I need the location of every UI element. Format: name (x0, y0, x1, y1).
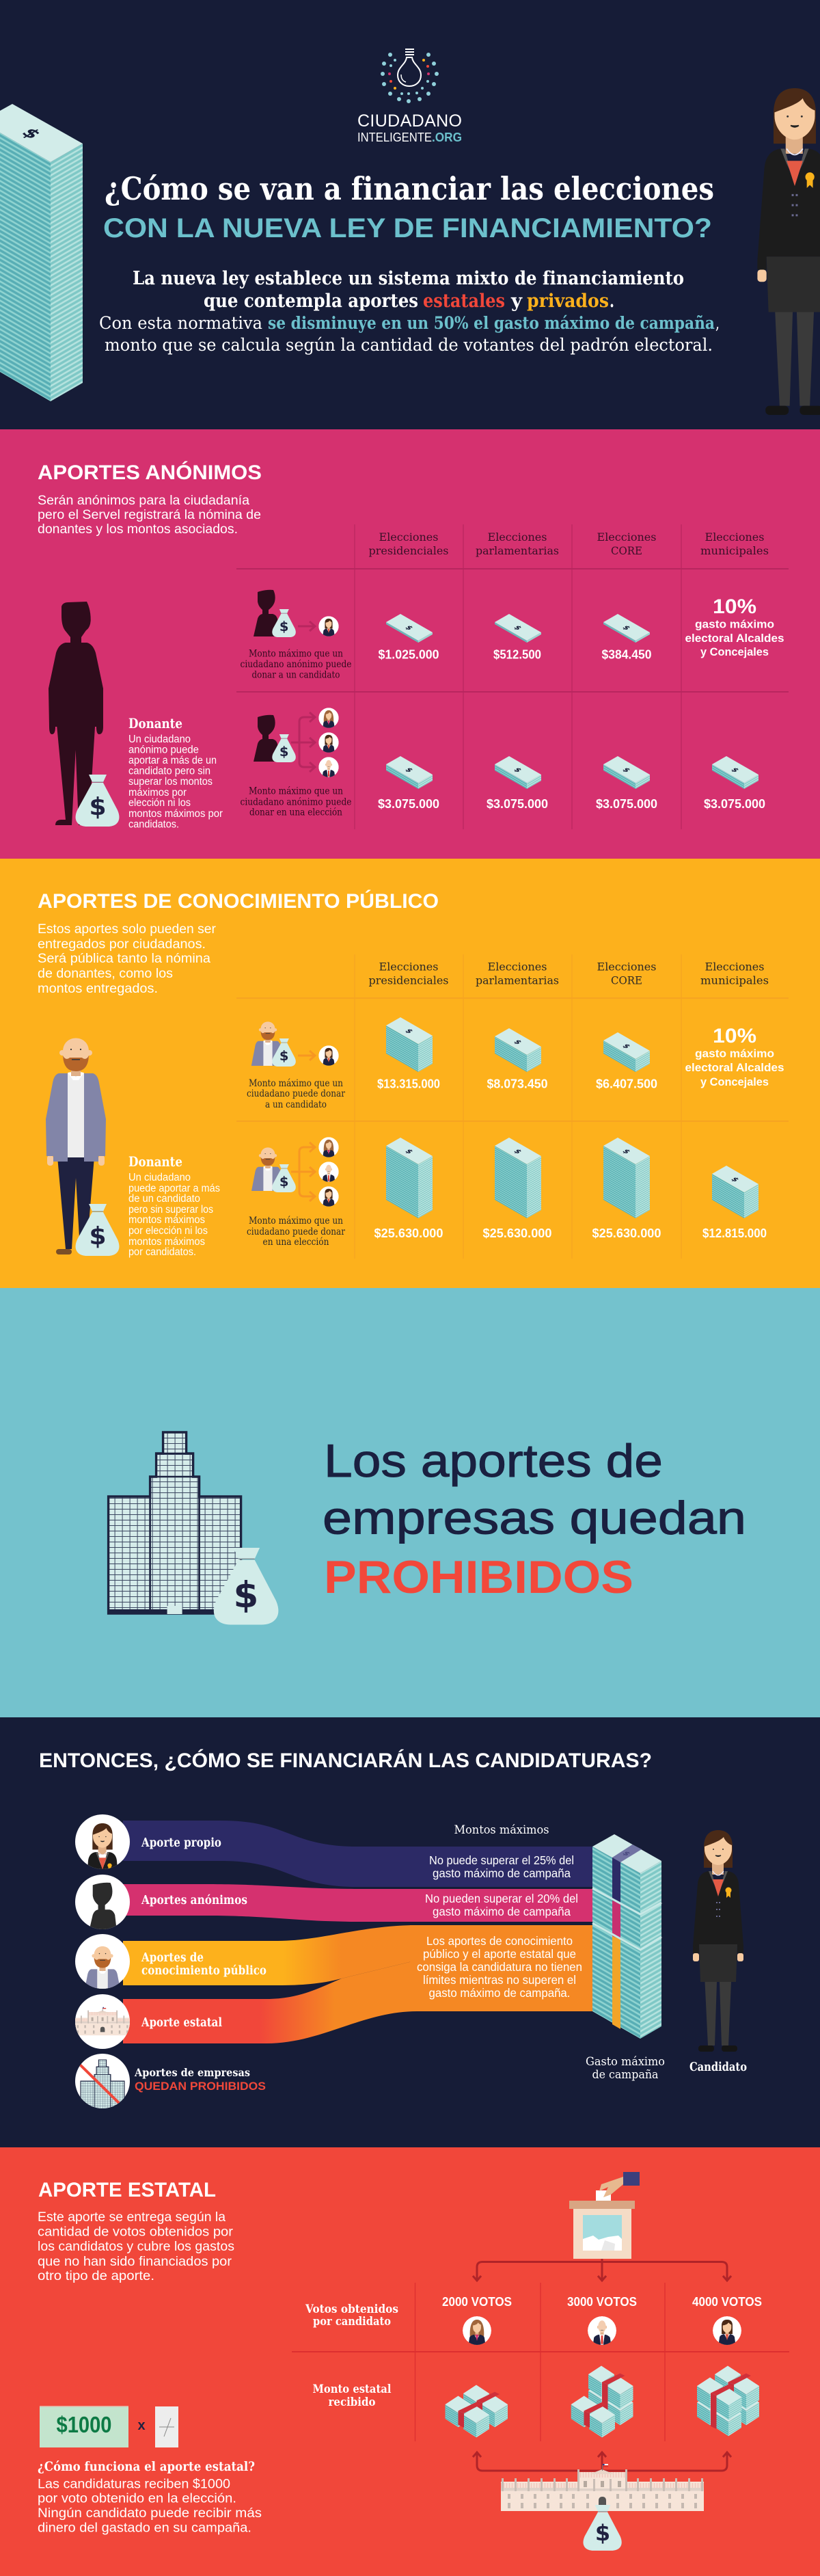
intro text: , (715, 313, 720, 333)
row 2: donor to several candidates: Monto máximo que un (249, 1216, 343, 1226)
intro text: estatales (423, 291, 505, 312)
intro text: Con esta normativa (99, 313, 262, 333)
band labels: Aportes de (141, 1951, 204, 1965)
donante text: puede aportar a más (128, 1183, 220, 1194)
icon: money bag: $ (89, 1222, 107, 1250)
figure: candidata (693, 1830, 743, 2052)
avatar: aportes anónimos (75, 1875, 130, 1935)
chart: montos por elección: $25.630.000 (482, 1226, 552, 1240)
callout: 10% municipales: electoral Alcaldes (685, 1062, 784, 1074)
intro text (99, 268, 720, 355)
description: otro tipo de aporte. (38, 2269, 154, 2283)
chart: montos por candidato: $13.315.000 (377, 1077, 440, 1091)
chart: montos por elección: $3.075.000 (596, 797, 657, 811)
panel: aporte estatal (0, 2147, 820, 2576)
icon: building and money bag (109, 1432, 278, 1624)
chart: montos por candidato: $ (512, 624, 524, 631)
chart: montos por elección: $ (620, 1148, 633, 1155)
row 1: donor to one candidate: a un candidato (265, 1099, 327, 1110)
statement: Los aportes de (324, 1435, 663, 1487)
chart: montos por elección: $ (729, 1176, 741, 1183)
column: 4000 votos: 4000 VOTOS (692, 2295, 762, 2309)
intro text: . (610, 291, 614, 312)
donante text: Un ciudadano (128, 1172, 191, 1183)
chart: montos por elección: $ (403, 1148, 415, 1155)
panel: empresas prohibidas (0, 1288, 820, 1717)
description: Este aporte se entrega según la (38, 2210, 226, 2225)
description: Será pública tanto la nómina (38, 952, 210, 966)
chart: montos por candidato: $ (512, 1038, 524, 1045)
table header: municipales (700, 974, 769, 987)
description: entregados por ciudadanos. (38, 937, 206, 952)
intro text: privados (527, 291, 609, 312)
row 2: donor to several candidates: ciudadano anónimo puede (241, 797, 351, 808)
statement (323, 1435, 746, 1603)
row labels: Votos obtenidos (305, 2303, 398, 2316)
chart: montos por elección: $3.075.000 (487, 797, 548, 811)
description (38, 2210, 234, 2283)
donante text: elección ni los (128, 797, 191, 809)
heading: APORTES DE CONOCIMIENTO PÚBLICO (38, 889, 439, 913)
table header: presidenciales (369, 544, 448, 557)
chart: montos por candidato: $ (403, 1028, 415, 1034)
table header: Elecciones (379, 531, 439, 544)
statement: empresas quedan (323, 1492, 746, 1544)
table header: Elecciones (705, 960, 764, 974)
donante text: montos máximos por (128, 808, 223, 820)
row 1: donor to one candidate: $ (279, 619, 288, 634)
chart: montos por candidato: $8.073.450 (487, 1077, 548, 1091)
row 2: donor to several candidates: Monto máximo que un (249, 786, 343, 797)
logo: Ciudadano Inteligente: CIUDADANO (357, 111, 462, 131)
flow bands (123, 1821, 592, 2043)
chart: montos por candidato: $ (620, 624, 633, 631)
row 1: donor to one candidate: Monto máximo que un (249, 649, 343, 660)
title (103, 170, 714, 243)
row 2: donor to several candidates (247, 1137, 345, 1248)
callout: 10% municipales: 10% (713, 595, 756, 618)
table header: Elecciones (488, 960, 547, 974)
table header: CORE (611, 974, 642, 987)
avatar: aporte propio (75, 1814, 130, 1869)
row 2: donor to several candidates: $ (279, 1174, 288, 1190)
icon: money bag (76, 1204, 119, 1256)
chart: montos por elección: $ (512, 1148, 524, 1155)
icon: money stack (0, 104, 83, 401)
callout: 10% municipales: gasto máximo (695, 618, 774, 630)
donante text: montos máximos (128, 1236, 205, 1248)
montos máximos text: Montos máximos (454, 1823, 549, 1837)
text: cómo funciona: por voto obtenido en la elección. (38, 2492, 236, 2506)
chart: montos por candidato (377, 1017, 657, 1091)
column: 4000 votos (692, 2295, 762, 2437)
description: donantes y los montos asociados. (38, 522, 238, 537)
table header: Elecciones (597, 531, 656, 544)
row 2: donor to several candidates (241, 708, 351, 818)
montos máximos text: No pueden superar el 20% del (425, 1892, 578, 1905)
montos máximos text: gasto máximo de campaña (433, 1866, 571, 1880)
icon: money bag: $ (595, 2520, 610, 2546)
logo: Ciudadano Inteligente (357, 49, 462, 144)
chart: montos por candidato: $384.450 (601, 648, 652, 662)
row 1: donor to one candidate: ciudadano puede donar (247, 1088, 345, 1099)
text: cómo funciona: Las candidaturas reciben $1000 (38, 2477, 230, 2491)
description: Estos aportes solo pueden ser (38, 922, 217, 937)
row labels: Monto estatal (313, 2383, 392, 2396)
intro text: y (510, 291, 523, 312)
chart: montos por elección: $25.630.000 (592, 1226, 661, 1240)
montos máximos text: consiga la candidatura no tienen (417, 1960, 582, 1974)
heading: APORTE ESTATAL (38, 2179, 216, 2201)
callout: 10% municipales: y Concejales (700, 1076, 769, 1088)
donante text: por candidatos. (128, 1246, 196, 1258)
montos máximos text (417, 1823, 582, 2000)
band labels: conocimiento público (141, 1964, 266, 1978)
table header: parlamentarias (476, 974, 559, 987)
title: ¿Cómo se van a financiar las elecciones (105, 170, 714, 207)
description (38, 922, 217, 996)
heading: APORTES ANÓNIMOS (38, 461, 262, 484)
donante text: Donante (128, 1153, 182, 1170)
table header: Elecciones (488, 531, 547, 544)
text: cómo funciona (38, 2460, 262, 2535)
donante text: de un candidato (128, 1193, 200, 1205)
icon: gasto máximo stack (592, 1834, 661, 2039)
description: los candidatos y cubre los gastos (38, 2240, 234, 2254)
description: de donantes, como los (38, 967, 173, 981)
row 1: donor to one candidate: Monto máximo que un (249, 1078, 343, 1089)
table header (369, 531, 769, 557)
table header: CORE (611, 544, 642, 557)
chart: montos por candidato: $ (403, 624, 415, 631)
chart: montos por candidato: $ (620, 1043, 633, 1049)
statement: PROHIBIDOS (324, 1551, 633, 1603)
chart: montos por candidato: $6.407.500 (596, 1077, 657, 1091)
intro text: monto que se calcula según la cantidad de votantes del padrón electoral. (105, 335, 713, 355)
donante text: candidatos. (128, 819, 179, 831)
table header: Elecciones (597, 960, 656, 974)
callout: 10% municipales: 10% (713, 1025, 756, 1047)
column: 2000 votos (442, 2295, 512, 2438)
panel: cómo se financiarán (40, 1749, 746, 2108)
montos máximos text: gasto máximo de campaña. (429, 1986, 570, 2000)
column: 3000 votos (567, 2295, 637, 2438)
description: pero el Servel registrará la nómina de (38, 508, 261, 522)
row labels (305, 2303, 398, 2409)
callout: 10% municipales: gasto máximo (695, 1047, 774, 1060)
avatar: aporte estatal (75, 1994, 130, 2049)
arrows: from ballot box to votes (473, 2259, 731, 2281)
donante text: máximos por (128, 787, 187, 799)
chart: montos por candidato (379, 614, 652, 662)
donante text: pero sin superar los (128, 1204, 213, 1216)
row 1: donor to one candidate (247, 1021, 345, 1110)
title: CON LA NUEVA LEY DE FINANCIAMIENTO? (103, 213, 712, 243)
donante text: aportar a más de un (128, 755, 217, 766)
row 2: donor to several candidates: $ (279, 744, 288, 760)
montos máximos text: No puede superar el 25% del (429, 1853, 574, 1867)
description: que no han sido financiados por (38, 2255, 232, 2269)
icon: La Moneda palace (501, 2464, 704, 2511)
logo: Ciudadano Inteligente: INTELIGENTE (357, 131, 432, 144)
chart: montos por elección: $3.075.000 (378, 797, 439, 811)
row 1: donor to one candidate: donar a un candidato (251, 670, 340, 681)
chart: montos por candidato: $512.500 (493, 648, 541, 662)
chart: montos por elección (378, 756, 765, 811)
row labels: por candidato (313, 2315, 391, 2329)
callout: 10% municipales (685, 595, 784, 658)
chart: montos por elección: $ (729, 766, 741, 773)
label: candidato: Candidato (689, 2060, 747, 2074)
table header: presidenciales (369, 974, 448, 987)
icon: ballot box (569, 2172, 640, 2259)
icon: money stack: $ (16, 126, 45, 142)
chart: montos por elección: $3.075.000 (704, 797, 765, 811)
figure: donante anónimo: $ (89, 793, 107, 821)
montos máximos text: límites mientras no superen el (423, 1973, 576, 1987)
description: montos entregados. (38, 982, 158, 996)
logo: Ciudadano Inteligente: .ORG (432, 131, 462, 144)
table header: Elecciones (379, 960, 439, 974)
figure: donante anónimo (49, 602, 119, 827)
label: gasto máximo: de campaña (592, 2068, 659, 2082)
formula: x (137, 2418, 146, 2433)
table header: parlamentarias (476, 544, 559, 557)
prohibited label: QUEDAN PROHIBIDOS (135, 2080, 266, 2093)
callout: 10% municipales: electoral Alcaldes (685, 632, 784, 645)
row 1: donor to one candidate: ciudadano anónimo puede (241, 659, 351, 670)
donante text (128, 715, 223, 831)
icon: building and money bag: $ (234, 1574, 258, 1616)
description: Serán anónimos para la ciudadanía (38, 494, 249, 508)
arrows: from state to amounts (473, 2452, 731, 2475)
avatar: conocimiento público (75, 1934, 130, 1989)
text: cómo funciona: Ningún candidato puede recibir más (38, 2506, 262, 2521)
chart: montos por elección: $25.630.000 (374, 1226, 443, 1240)
chart: montos por elección: $ (512, 766, 524, 773)
description: cantidad de votos obtenidos por (38, 2225, 234, 2240)
column: 3000 votos: 3000 VOTOS (567, 2295, 637, 2309)
row labels: recibido (328, 2396, 376, 2409)
donante text: Un ciudadano (128, 734, 191, 745)
donante text: anónimo puede (128, 744, 199, 756)
text: cómo funciona: dinero del gastado en su campaña. (38, 2521, 251, 2535)
icon: money bag (583, 2505, 622, 2551)
montos máximos text: gasto máximo de campaña (433, 1905, 571, 1918)
column: 2000 votos: 2000 VOTOS (442, 2295, 512, 2309)
figure: candidata (757, 88, 820, 415)
donante text: superar los montos (128, 776, 213, 788)
intro text: La nueva ley establece un sistema mixto de financiamiento (133, 268, 684, 289)
table header: municipales (700, 544, 769, 557)
band labels: Aporte propio (141, 1836, 221, 1850)
heading: ENTONCES, ¿CÓMO SE FINANCIARÁN LAS CANDIDATURAS? (39, 1749, 652, 1772)
donante text (128, 1153, 220, 1258)
montos máximos text: público y el aporte estatal que (423, 1947, 576, 1961)
description (38, 494, 261, 537)
intro text: que contempla aportes (204, 291, 418, 312)
row 1: donor to one candidate (241, 590, 351, 681)
label: gasto máximo (586, 2055, 665, 2082)
band labels (134, 1836, 266, 2079)
callout: 10% municipales (685, 1025, 784, 1088)
table header: Elecciones (705, 531, 764, 544)
donante text: candidato pero sin (128, 766, 210, 777)
formula: $1000 (56, 2412, 112, 2437)
panel: aportes de conocimiento público (0, 859, 820, 1288)
row 1: donor to one candidate: $ (279, 1048, 288, 1064)
band labels: Aportes anónimos (141, 1894, 247, 1907)
donante text: por elección ni los (128, 1225, 208, 1237)
intro text: se disminuye en un 50% el gasto máximo de campaña (268, 313, 715, 333)
chart: montos por elección: $ (620, 766, 633, 773)
text: cómo funciona: ¿Cómo funciona el aporte estatal? (38, 2460, 255, 2474)
montos máximos text: Los aportes de conocimiento (426, 1934, 573, 1948)
band labels: Aporte estatal (141, 2016, 222, 2030)
chart: montos por elección (374, 1138, 767, 1240)
label: gasto máximo: Gasto máximo (586, 2055, 665, 2069)
donante text: montos máximos (128, 1214, 205, 1226)
formula (40, 2406, 178, 2447)
chart: montos por elección: $ (403, 766, 415, 773)
chart: montos por candidato: $1.025.000 (379, 648, 439, 662)
icon: gasto máximo stack: $ (620, 1850, 633, 1857)
callout: 10% municipales: y Concejales (700, 646, 769, 658)
panel: header (0, 0, 820, 429)
table header (369, 960, 769, 987)
panel: aportes anónimos (0, 429, 820, 859)
row 2: donor to several candidates: donar en una elección (249, 807, 342, 818)
band labels: Aportes de empresas (134, 2066, 250, 2079)
row 2: donor to several candidates: ciudadano puede donar (247, 1226, 345, 1237)
chart: montos por elección: $12.815.000 (702, 1226, 767, 1240)
avatar: empresas prohibidas (75, 2054, 130, 2108)
figure: donante (46, 1038, 106, 1255)
row 2: donor to several candidates: en una elección (262, 1237, 329, 1248)
donante text: Donante (128, 715, 182, 732)
